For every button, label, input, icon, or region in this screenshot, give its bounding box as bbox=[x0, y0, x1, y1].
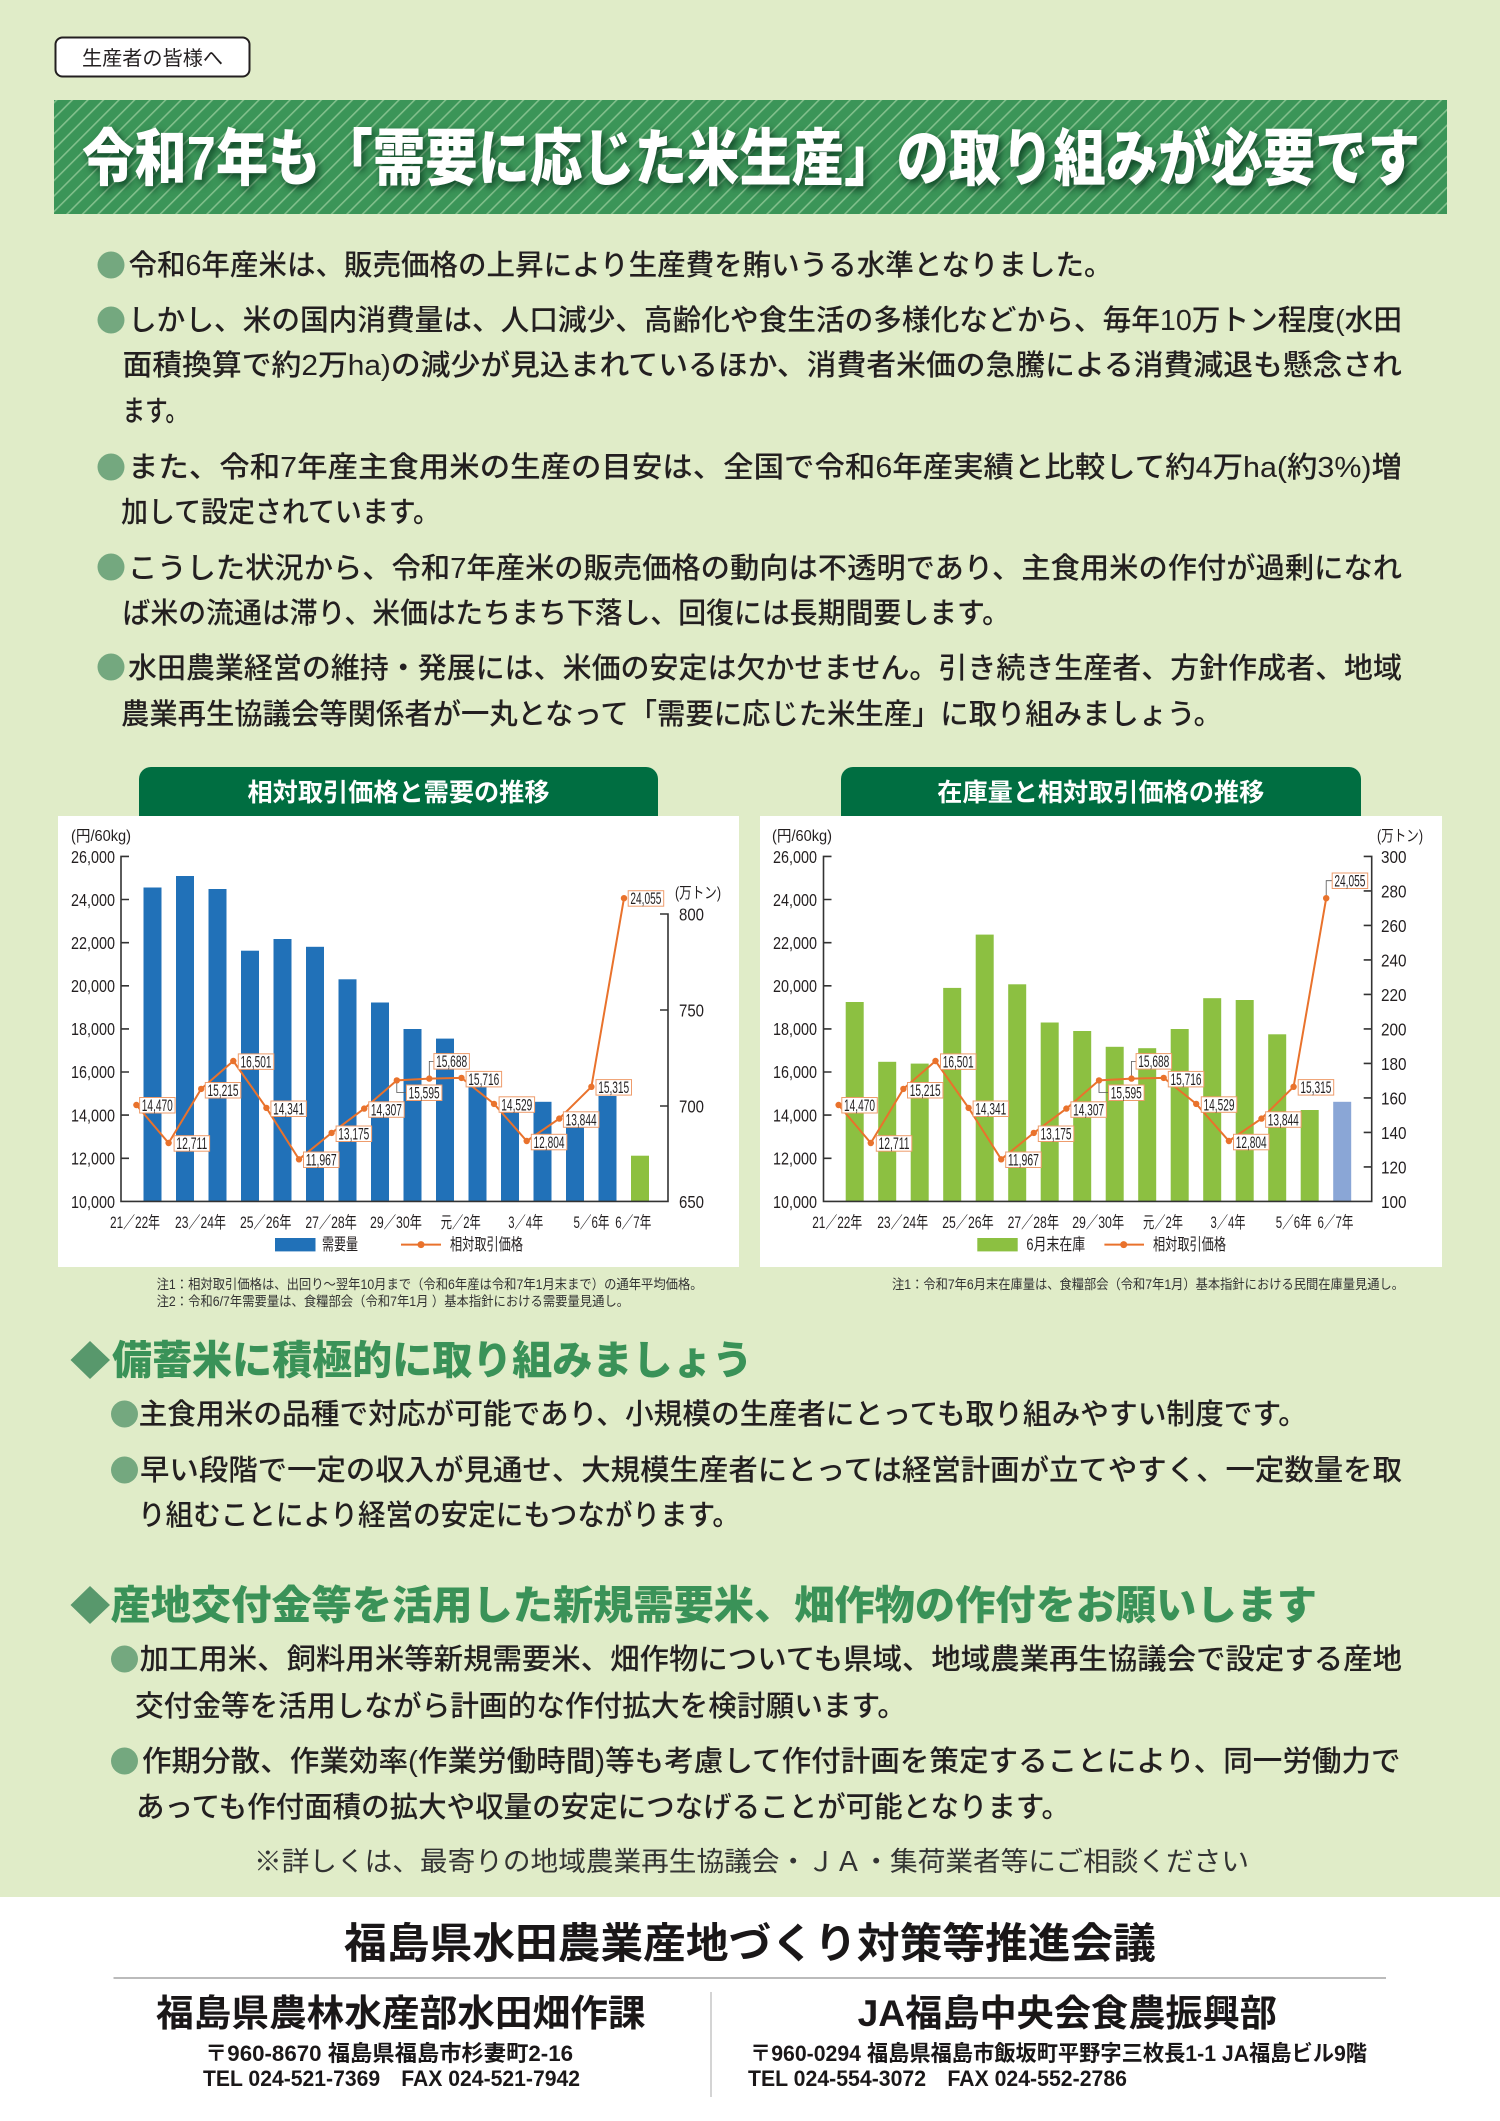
price line series: 24,055 bbox=[630, 889, 661, 908]
left axis labels bbox=[71, 828, 131, 1212]
text block: intro bullets: 加して設定されています。 bbox=[121, 497, 440, 529]
chart heading bbox=[139, 767, 658, 816]
legend bbox=[977, 1235, 1226, 1254]
right axis labels bbox=[675, 885, 721, 1212]
year labels bbox=[110, 1213, 651, 1232]
title banner bbox=[54, 100, 1447, 214]
section: new demand rice: あっても作付面積の拡大や収量の安定につなげることが可能となります。 bbox=[136, 1791, 1070, 1824]
price line series: 11,967 bbox=[306, 1150, 337, 1170]
right axis labels: 120 bbox=[1381, 1158, 1407, 1178]
legend: 6月末在庫 bbox=[1026, 1235, 1085, 1254]
text block: intro bullets bbox=[98, 249, 1402, 731]
section: new demand rice: 加工用米、飼料用米等新規需要米、畑作物についても県域、地域農業再生協議会で設定する産地 bbox=[140, 1643, 1402, 1676]
price line series: 15,688 bbox=[1138, 1052, 1169, 1071]
left axis labels: 14,000 bbox=[773, 1106, 817, 1126]
left axis labels: 16,000 bbox=[71, 1062, 115, 1082]
axes bbox=[121, 856, 668, 1201]
price line series: 15,215 bbox=[208, 1081, 238, 1100]
left axis labels: 22,000 bbox=[773, 933, 817, 953]
chart heading bbox=[841, 767, 1361, 816]
left axis labels bbox=[772, 828, 832, 1212]
tag: audience label bbox=[56, 38, 250, 76]
contact: JA office: TEL 024-554-3072 FAX 024-552-2786 bbox=[748, 2066, 1127, 2091]
price line series: 14,470 bbox=[142, 1096, 173, 1115]
year labels: 21／22年 bbox=[110, 1213, 160, 1232]
text block: intro bullets: 面積換算で約2万ha)の減少が見込まれているほか、消費者米価の急騰による消費減退も懸念され bbox=[122, 349, 1402, 382]
legend: 相対取引価格 bbox=[1153, 1235, 1226, 1254]
price line series: 12,804 bbox=[1236, 1133, 1267, 1152]
section: stockpile rice: り組むことにより経営の安定にもつながります。 bbox=[138, 1499, 740, 1532]
panel: stock and price chart bbox=[760, 767, 1442, 1267]
text block: intro bullets: 令和6年産米は、販売価格の上昇により生産費を賄いうる水準となりました。 bbox=[128, 249, 1112, 282]
right axis labels: (万トン) bbox=[1377, 828, 1423, 845]
price line series: 13,844 bbox=[1268, 1110, 1299, 1129]
left axis labels: 26,000 bbox=[71, 847, 115, 867]
right axis labels: 140 bbox=[1381, 1123, 1407, 1143]
contact: prefecture office: 〒960-8670 福島県福島市杉妻町2-16 bbox=[205, 2041, 573, 2066]
year labels: 5／6年 bbox=[574, 1213, 610, 1232]
text block: intro bullets: こうした状況から、令和7年産米の販売価格の動向は不透明であり、主食用米の作付が過剰になれ bbox=[128, 552, 1402, 585]
section: stockpile rice: 早い段階で一定の収入が見通せ、大規模生産者にとっては経営計画が立てやすく、一定数量を取 bbox=[140, 1454, 1402, 1487]
axes bbox=[824, 856, 1372, 1201]
right axis labels: 100 bbox=[1381, 1192, 1407, 1212]
left axis labels: 20,000 bbox=[71, 976, 115, 996]
price line series: 13,844 bbox=[566, 1110, 597, 1129]
year labels: 元／2年 bbox=[441, 1213, 481, 1232]
price line series: 13,175 bbox=[1040, 1124, 1072, 1144]
chart notes: left: 注2：令和6/7年需要量は、食糧部会（令和7年1月 ）基本指針における需要量見通し。 bbox=[157, 1293, 629, 1309]
text block: intro bullets: また、令和7年産主食用米の生産の目安は、全国で令和6年産実績と比較して約4万ha(約3%)増 bbox=[128, 451, 1402, 484]
price line series: 15,215 bbox=[910, 1081, 941, 1100]
left axis labels: 20,000 bbox=[773, 976, 817, 996]
right axis labels: 700 bbox=[679, 1096, 704, 1116]
text block: intro bullets: しかし、米の国内消費量は、人口減少、高齢化や食生活の多様化などから、毎年10万トン程度(水田 bbox=[128, 304, 1402, 337]
price line series: 12,711 bbox=[879, 1134, 910, 1153]
chart notes: left: 注1：相対取引価格は、出回り～翌年10月まで（令和6年産は令和7年1月末まで）の通年平均価格。 bbox=[157, 1277, 703, 1292]
year labels: 27／28年 bbox=[305, 1213, 357, 1232]
right axis labels: 200 bbox=[1381, 1020, 1407, 1040]
right axis labels: 800 bbox=[679, 904, 704, 924]
tag: audience label: 生産者の皆様へ bbox=[82, 47, 223, 70]
year labels: 6／7年 bbox=[615, 1213, 651, 1232]
section: new demand rice bbox=[70, 1584, 1402, 1824]
right axis labels: 180 bbox=[1381, 1054, 1407, 1074]
price line series: 15,716 bbox=[1170, 1070, 1202, 1089]
price line series: 14,341 bbox=[273, 1100, 304, 1118]
contact: JA office bbox=[748, 1993, 1367, 2091]
stock bars bbox=[846, 935, 1351, 1201]
year labels: 23／24年 bbox=[877, 1213, 928, 1232]
left axis labels: 12,000 bbox=[773, 1148, 817, 1168]
demand bars bbox=[144, 876, 649, 1201]
text block: intro bullets: ば米の流通は滞り、米価はたちまち下落し、回復には長期間要します。 bbox=[122, 597, 1010, 630]
price line series: 14,307 bbox=[1073, 1100, 1104, 1119]
icon: diamond bbox=[70, 1586, 110, 1624]
right axis labels: 220 bbox=[1381, 985, 1407, 1005]
left axis labels: 24,000 bbox=[773, 890, 817, 910]
icon: diamond bbox=[70, 1341, 110, 1379]
year labels: 6／7年 bbox=[1318, 1213, 1354, 1232]
price line series: 12,804 bbox=[534, 1133, 564, 1152]
right axis labels: 160 bbox=[1381, 1088, 1407, 1108]
right axis labels: (万トン) bbox=[675, 885, 721, 902]
chart notes: left bbox=[157, 1277, 703, 1309]
price line series: 24,055 bbox=[1334, 872, 1365, 890]
section: new demand rice: 交付金等を活用しながら計画的な作付拡大を検討願います。 bbox=[135, 1690, 906, 1723]
right axis labels: 650 bbox=[679, 1192, 704, 1212]
left axis labels: 22,000 bbox=[71, 933, 115, 953]
year labels: 25／26年 bbox=[240, 1213, 292, 1232]
panel: price and demand chart bbox=[58, 767, 739, 1267]
price line series: 11,967 bbox=[1008, 1150, 1039, 1170]
section: new demand rice: 作期分散、作業効率(作業労働時間)等も考慮して作付計画を策定することにより、同一労働力で bbox=[142, 1745, 1401, 1778]
text block: intro bullets: 水田農業経営の維持・発展には、米価の安定は欠かせません。引き続き生産者、方針作成者、地域 bbox=[128, 652, 1402, 685]
price line series: 16,501 bbox=[943, 1052, 974, 1071]
left axis labels: 26,000 bbox=[773, 847, 817, 867]
text block: intro bullets: 農業再生協議会等関係者が一丸となって「需要に応じた米生産」に取り組みましょう。 bbox=[121, 698, 1222, 731]
left axis labels: (円/60kg) bbox=[71, 828, 131, 845]
right axis labels: 260 bbox=[1381, 916, 1407, 936]
left axis labels: 18,000 bbox=[773, 1019, 817, 1039]
price line series: 15,595 bbox=[409, 1084, 440, 1102]
section: stockpile rice bbox=[70, 1339, 1402, 1532]
right axis labels bbox=[1377, 828, 1423, 1212]
contact: prefecture office bbox=[156, 1993, 646, 2091]
legend: 相対取引価格 bbox=[450, 1235, 523, 1254]
left axis labels: 24,000 bbox=[71, 890, 115, 910]
right axis labels: 240 bbox=[1381, 950, 1407, 970]
year labels: 元／2年 bbox=[1143, 1213, 1183, 1232]
year labels: 3／4年 bbox=[508, 1213, 543, 1232]
chart note: right: 注1：令和7年6月末在庫量は、食糧部会（令和7年1月）基本指針における民間在庫量見通し。 bbox=[892, 1276, 1404, 1292]
section heading: 産地交付金等を活用した新規需要米、畑作物の作付をお願いします bbox=[111, 1584, 1317, 1628]
year labels: 5／6年 bbox=[1276, 1213, 1312, 1232]
left axis labels: 12,000 bbox=[71, 1148, 115, 1168]
price line series: 15,595 bbox=[1111, 1084, 1142, 1102]
chart heading: 相対取引価格と需要の推移 bbox=[248, 779, 550, 807]
price line series: 15,716 bbox=[468, 1070, 499, 1089]
left axis labels: 18,000 bbox=[71, 1019, 115, 1039]
legend: 需要量 bbox=[322, 1236, 358, 1254]
price line series: 15,315 bbox=[598, 1078, 629, 1097]
year labels: 29／30年 bbox=[370, 1213, 422, 1232]
section heading: 備蓄米に積極的に取り組みましょう bbox=[112, 1339, 752, 1383]
contact note: ※詳しくは、最寄りの地域農業再生協議会・ＪＡ・集荷業者等にご相談ください bbox=[254, 1847, 1249, 1877]
section: stockpile rice: 主食用米の品種で対応が可能であり、小規模の生産者にとっても取り組みやすい制度です。 bbox=[139, 1398, 1307, 1431]
year labels: 3／4年 bbox=[1210, 1213, 1246, 1232]
contact: JA office: JA福島中央会食農振興部 bbox=[858, 1993, 1277, 2034]
year labels: 23／24年 bbox=[175, 1213, 226, 1232]
text block: intro bullets: ます。 bbox=[122, 396, 188, 428]
left axis labels: 10,000 bbox=[773, 1192, 817, 1212]
left axis labels: 14,000 bbox=[71, 1106, 115, 1126]
price line series: 13,175 bbox=[338, 1124, 369, 1144]
price line series: 14,341 bbox=[975, 1100, 1006, 1118]
price line series bbox=[133, 889, 664, 1170]
year labels: 27／28年 bbox=[1008, 1213, 1059, 1232]
price line series: 14,529 bbox=[1204, 1095, 1234, 1114]
left axis labels: 10,000 bbox=[71, 1192, 115, 1212]
price line series: 15,688 bbox=[436, 1052, 467, 1071]
price line series: 12,711 bbox=[176, 1134, 207, 1153]
legend bbox=[275, 1235, 523, 1254]
contact: prefecture office: TEL 024-521-7369 FAX 024-521-7942 bbox=[203, 2066, 580, 2091]
price line series bbox=[835, 872, 1368, 1170]
footer panel bbox=[0, 1897, 1500, 2121]
price line series: 16,501 bbox=[240, 1052, 272, 1071]
right axis labels: 280 bbox=[1381, 882, 1407, 902]
price line series: 14,307 bbox=[371, 1100, 402, 1119]
price line series: 14,529 bbox=[501, 1095, 532, 1114]
left axis labels: (円/60kg) bbox=[772, 828, 832, 845]
year labels: 21／22年 bbox=[812, 1213, 862, 1232]
price line series: 15,315 bbox=[1300, 1078, 1331, 1097]
contact: prefecture office: 福島県農林水産部水田畑作課 bbox=[156, 1993, 646, 2034]
price line series: 14,470 bbox=[844, 1096, 875, 1115]
right axis labels: 300 bbox=[1381, 847, 1407, 867]
year labels: 25／26年 bbox=[942, 1213, 994, 1232]
contact: JA office: 〒960-0294 福島県福島市飯坂町平野字三枚長1-1 JA福島ビル9階 bbox=[750, 2041, 1367, 2066]
year labels: 29／30年 bbox=[1072, 1213, 1124, 1232]
chart heading: 在庫量と相対取引価格の推移 bbox=[937, 779, 1264, 807]
year labels bbox=[812, 1213, 1354, 1232]
left axis labels: 16,000 bbox=[773, 1062, 817, 1082]
right axis labels: 750 bbox=[679, 1000, 704, 1020]
footer title: 福島県水田農業産地づくり対策等推進会議 bbox=[344, 1920, 1156, 1967]
